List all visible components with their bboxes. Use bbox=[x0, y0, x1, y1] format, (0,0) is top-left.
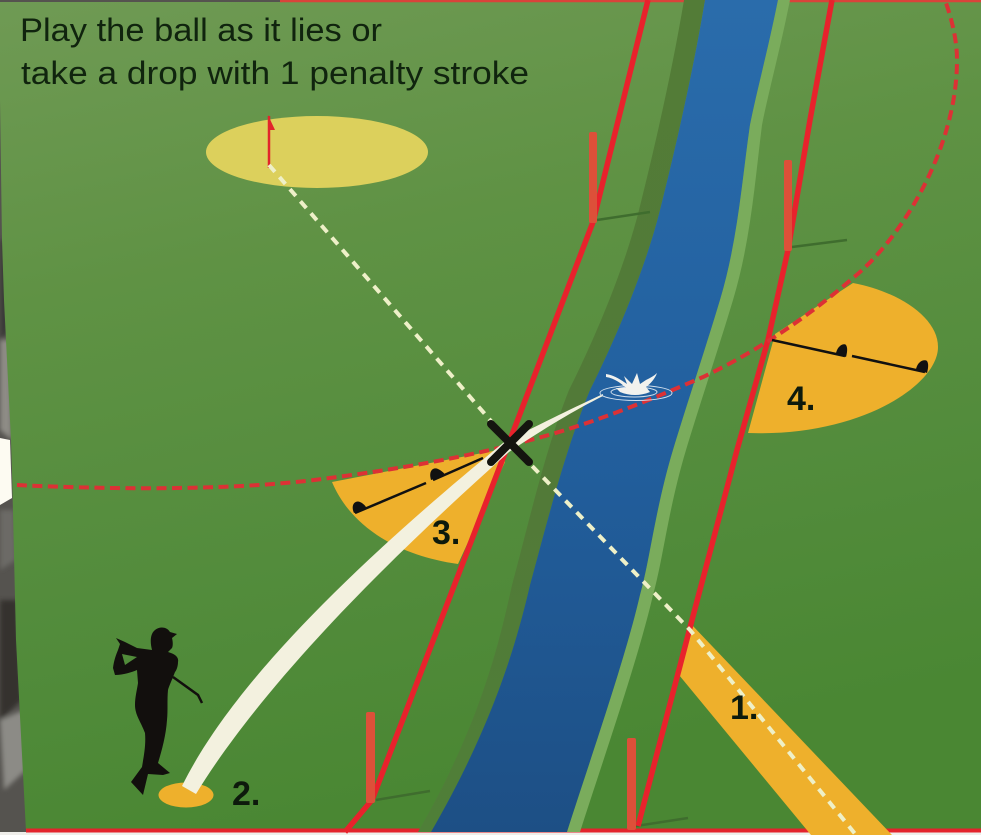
stake bbox=[627, 738, 636, 830]
option 4 drop zone bbox=[748, 283, 938, 433]
heading line 2: take a drop with 1 penalty stroke bbox=[21, 55, 529, 91]
label 4: 4. bbox=[787, 380, 815, 418]
right hazard boundary line bbox=[638, 0, 832, 826]
dashed line from flag through point of entry bbox=[269, 165, 856, 835]
X mark: point of entry bbox=[491, 424, 529, 462]
glare patch bbox=[0, 438, 12, 505]
golf club bbox=[173, 677, 202, 703]
label 2: 2. bbox=[232, 775, 260, 813]
option 3 drop zone bbox=[332, 450, 505, 564]
green with flag bbox=[206, 115, 428, 188]
stake bbox=[589, 132, 597, 223]
bottom red border bbox=[26, 828, 981, 832]
label 3: 3. bbox=[432, 514, 460, 552]
water splash bbox=[600, 373, 672, 400]
hazard bank: dark green strip bbox=[418, 0, 705, 832]
option 1 drop zone: band behind the hazard on line to the flag bbox=[679, 625, 892, 835]
left hazard boundary line bbox=[345, 0, 648, 832]
river bbox=[431, 0, 778, 832]
red dashed arc: two club lengths radius bbox=[17, 0, 957, 488]
ball flight arc bbox=[182, 394, 603, 794]
heading line 1: Play the ball as it lies or bbox=[20, 12, 382, 48]
putting green bbox=[206, 116, 428, 188]
flag pole bbox=[268, 116, 270, 168]
stake bbox=[784, 160, 792, 251]
top red border bbox=[280, 0, 981, 2]
club: option 3 outer bbox=[353, 483, 426, 513]
label 1: 1. bbox=[730, 689, 758, 727]
splash spray bbox=[606, 373, 657, 395]
golfer body bbox=[113, 628, 178, 795]
ripples bbox=[600, 386, 672, 400]
post shadows bbox=[376, 212, 847, 826]
stake bbox=[366, 712, 375, 803]
flag bbox=[268, 115, 275, 130]
hazard bank: light green strip bbox=[567, 0, 790, 832]
red stakes bbox=[366, 132, 792, 830]
club: option 3 inner bbox=[430, 458, 483, 480]
club length markers bbox=[353, 340, 928, 513]
club: option 4 inner bbox=[772, 340, 847, 357]
golfer silhouette bbox=[113, 628, 202, 795]
option 2 tee spot bbox=[158, 782, 214, 808]
heading text bbox=[20, 12, 529, 91]
club: option 4 outer bbox=[852, 356, 928, 373]
inner ripple bbox=[611, 387, 657, 397]
